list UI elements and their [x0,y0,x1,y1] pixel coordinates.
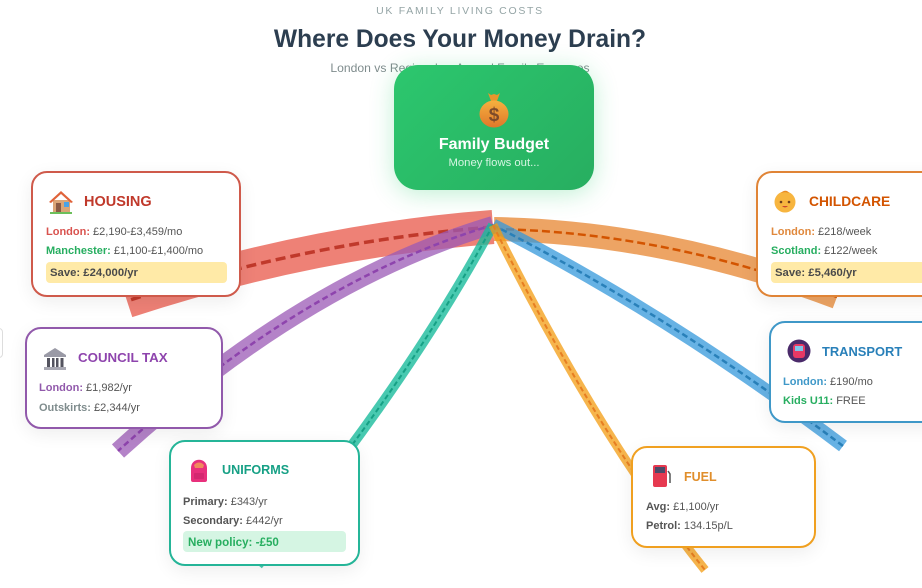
kids under 11 fare: Kids U11: FREE [783,395,866,407]
stream: council tax [118,225,493,451]
fuel average cost: Avg: £1,100/yr [646,501,719,513]
icon: baby [774,190,796,212]
icon: metro train [788,340,810,362]
council tax London cost: London: £1,982/yr [39,382,132,394]
heading: uniforms: UNIFORMS [222,463,289,477]
budget label: Family Budget [439,136,549,153]
eyebrow label: UK FAMILY LIVING COSTS [376,5,544,17]
primary cost: Primary: £343/yr [183,496,267,508]
icon: money bag [480,93,508,128]
council tax outskirts cost: Outskirts: £2,344/yr [39,402,140,414]
icon: backpack [191,460,207,482]
panel: housing [31,171,241,297]
panel: fuel [631,446,816,548]
title: Where Does Your Money Drain? [274,26,646,53]
icon: house [49,191,73,214]
secondary cost: Secondary: £442/yr [183,515,283,527]
heading: housing: HOUSING [84,194,152,210]
heading: transport: TRANSPORT [822,344,902,359]
heading: childcare: CHILDCARE [809,194,890,209]
housing London cost: London: £2,190-£3,459/mo [46,226,182,238]
central node: family budget [394,65,594,190]
childcare Scotland cost: Scotland: £122/week [771,245,877,257]
childcare saving callout [771,262,922,283]
icon: fuel pump [653,465,671,487]
heading: council tax: COUNCIL TAX [78,350,168,365]
transport London cost: London: £190/mo [783,376,873,388]
childcare London cost: London: £218/week [771,226,871,238]
housing Manchester cost: Manchester: £1,100-£1,400/mo [46,245,203,257]
panel: council tax [25,327,223,429]
budget sublabel: Money flows out... [448,157,540,169]
stream: childcare [494,229,837,297]
petrol price: Petrol: 134.15p/L [646,520,733,532]
panel: uniforms [169,440,360,566]
new policy callout [183,531,346,552]
stream: uniforms [258,225,493,565]
housing saving callout: Save: £24,000/yr [50,267,138,279]
icon: money bag: $ [489,105,500,126]
stream: transport [493,225,843,446]
stream: fuel [493,225,705,570]
heading: fuel: FUEL [684,470,717,484]
subtitle: London vs Regional — Annual Family Expenses [330,61,590,75]
edge fragment at left [0,328,3,358]
icon: government building [44,348,66,370]
panel: transport [769,321,922,423]
new policy callout: New policy: -£50 [188,536,279,549]
stream: housing [127,227,493,301]
housing saving callout [46,262,227,283]
panel: childcare [756,171,922,297]
childcare saving callout: Save: £5,460/yr [775,267,857,279]
